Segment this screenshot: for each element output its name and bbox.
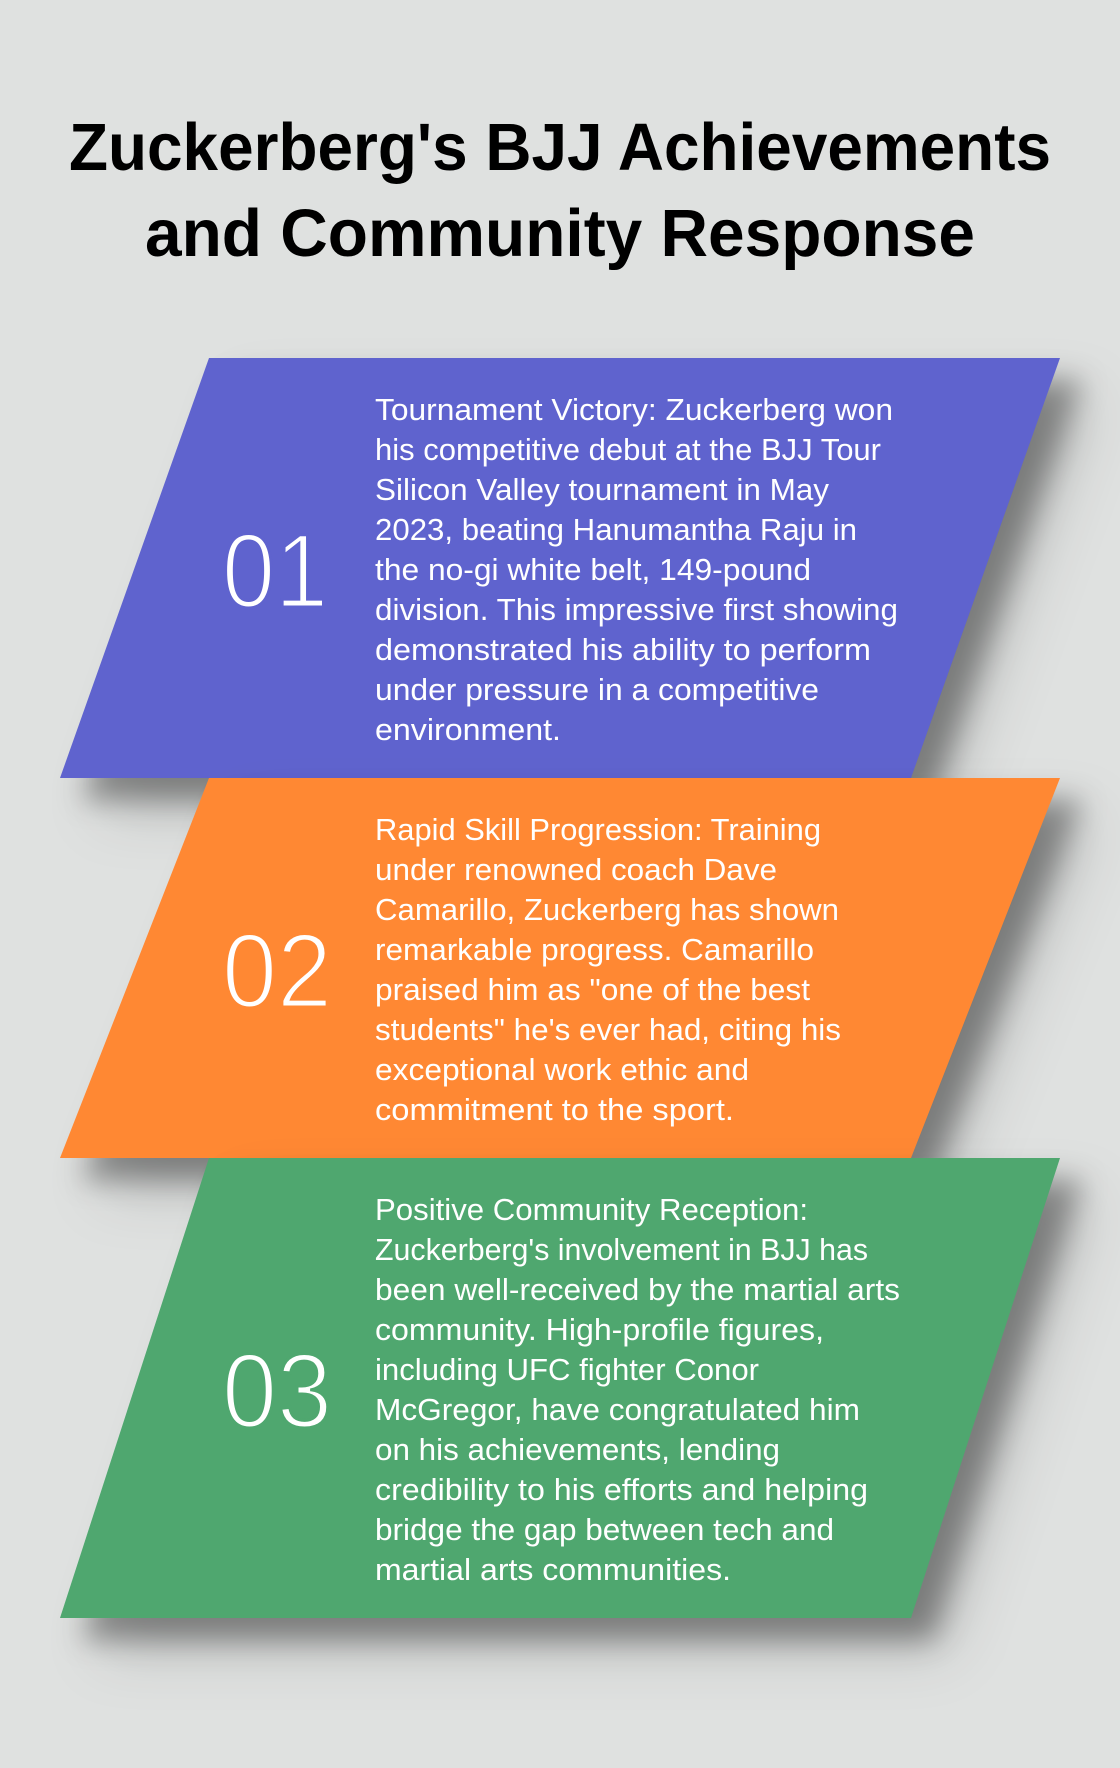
body text: 2023, beating Hanumantha Raju in [375,513,857,547]
body text: under renowned coach Dave [375,853,777,887]
body text: bridge the gap between tech and [375,1513,834,1547]
body text: Rapid Skill Progression: Training [375,813,821,847]
body text [375,813,841,1127]
body text: Silicon Valley tournament in May [375,473,830,507]
body text: praised him as "one of the best [375,973,811,1007]
panel shadow [82,380,1096,814]
body text: his competitive debut at the BJJ Tour [375,433,881,467]
body text: division. This impressive first showing [375,593,898,627]
body text: Positive Community Reception: [375,1193,808,1227]
body text: exceptional work ethic and [375,1053,749,1087]
body text: McGregor, have congratulated him [375,1393,860,1427]
body text: been well-received by the martial arts [375,1273,900,1307]
body text: commitment to the sport. [375,1093,734,1127]
body text: environment. [375,713,561,747]
body text: including UFC fighter Conor [375,1353,759,1387]
body text: community. High-profile figures, [375,1313,824,1347]
panel: rapid skill progression [60,778,1096,1194]
panel shadow [82,1180,1096,1654]
panel shape [60,358,1060,778]
step number: 01 [222,513,328,630]
panel shadow [82,800,1096,1194]
panel: tournament victory [60,358,1096,814]
panel shape [60,1158,1060,1618]
title [69,110,1051,271]
body text: Zuckerberg's involvement in BJJ has [375,1233,868,1267]
body text: the no-gi white belt, 149-pound [375,553,811,587]
panel shape [60,778,1060,1158]
body text: students" he's ever had, citing his [375,1013,841,1047]
body text: Tournament Victory: Zuckerberg won [375,393,893,427]
body text: credibility to his efforts and helping [375,1473,868,1507]
body text [375,393,898,747]
body text: remarkable progress. Camarillo [375,933,814,967]
body text [375,1193,900,1587]
step number: 03 [222,1333,332,1450]
title: and Community Response [145,196,975,271]
title: Zuckerberg's BJJ Achievements [69,110,1051,185]
step number: 02 [222,913,332,1030]
body text: martial arts communities. [375,1553,731,1587]
body text: demonstrated his ability to perform [375,633,871,667]
panel: positive community reception [60,1158,1096,1654]
body text: under pressure in a competitive [375,673,819,707]
body text: on his achievements, lending [375,1433,780,1467]
body text: Camarillo, Zuckerberg has shown [375,893,839,927]
